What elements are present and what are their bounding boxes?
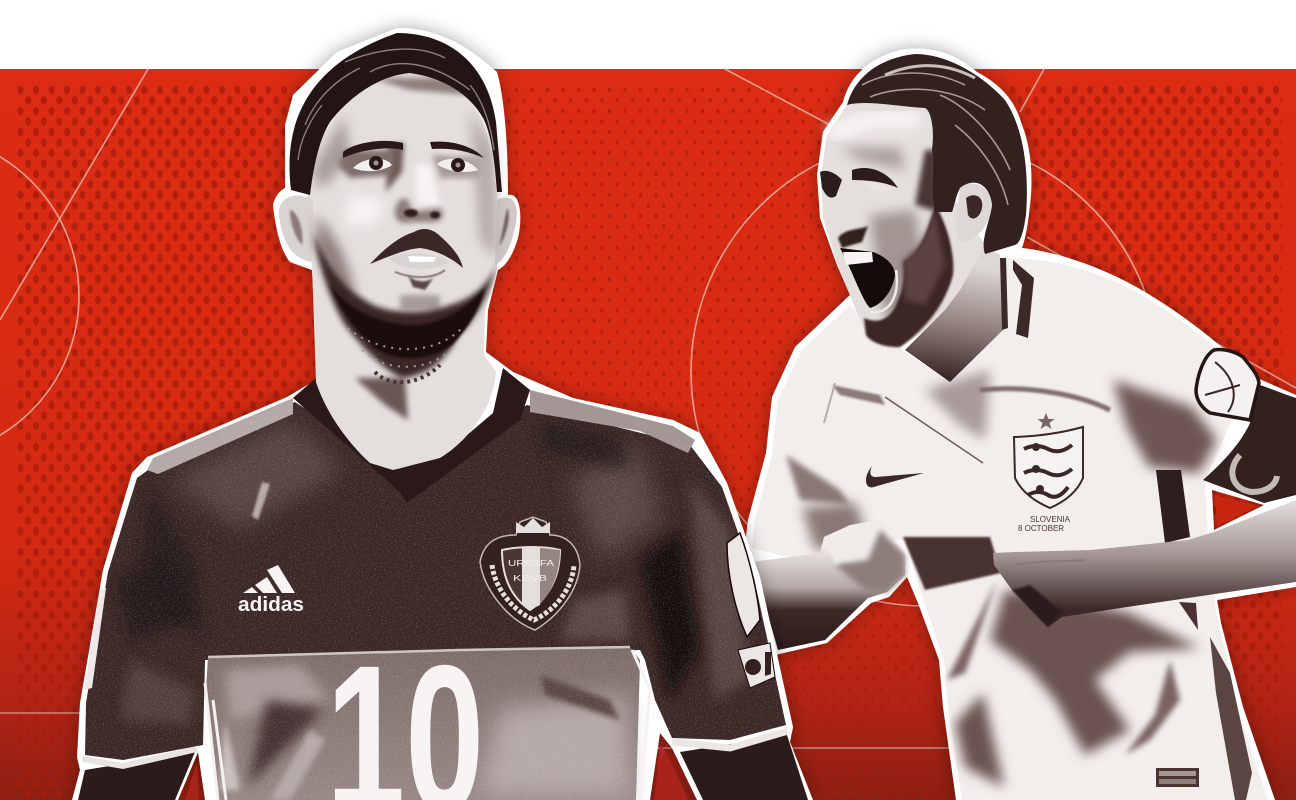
shirt base [752,258,1268,800]
logo: adidas [238,565,304,616]
right arm [993,500,1296,627]
eyes and brows [820,168,898,198]
open mouth [840,248,895,308]
head base [821,102,985,347]
ear right [495,198,517,265]
shirt match text: SLOVENIA [1030,515,1071,524]
side stripes [205,650,650,800]
nose [838,226,868,248]
under-shirt dark fold [903,537,1001,590]
player right: white cut-out outline [744,49,1296,800]
band top edge [208,647,630,657]
beard [313,232,497,382]
ear left [279,196,313,262]
hair highlights [862,66,1010,205]
ear [956,183,992,242]
mouth [388,253,450,269]
shirt grain texture [85,402,786,800]
sleeve badge [1196,349,1259,420]
beard texture [348,328,462,367]
eyes [353,159,478,172]
right sleeve shadow [1113,380,1217,473]
player right: shirt and body [752,54,1296,800]
player right: shirt and body: 8 OCTOBER [1018,524,1064,533]
left arm and fist [752,520,905,650]
sleeve sponsor patch [738,643,775,688]
nose [395,198,443,223]
sleeve badge [727,533,760,637]
icon: swoosh [866,466,924,487]
hair [289,33,502,195]
collar [293,368,530,503]
sleeve shading [802,503,868,550]
player left: shirt and body [78,33,808,800]
icon: belgium crest [480,517,580,630]
logo: adidas: adidas [238,594,304,616]
neck [905,230,1003,382]
icon: belgium crest: KBVB [513,574,547,583]
player left: white cut-out outline [72,28,813,800]
icon: belgium crest: URBSFA [508,559,555,568]
brows [343,141,484,158]
light band on shirt [206,647,640,800]
shoulder stripes [147,398,293,474]
left sleeve piping [84,588,106,690]
cuffs and forearms [78,752,195,800]
shirt sheen patches [115,420,750,725]
armband [1203,384,1296,503]
shirt size label [1156,768,1199,787]
belly shadows [990,590,1200,755]
red gap beneath left cuff [185,762,199,800]
moustache [370,229,463,268]
hair [847,54,1027,254]
main shirt [85,402,786,760]
band shading [220,665,630,800]
icon: england crest [1014,413,1083,508]
side stripes [1156,470,1190,543]
neck and face base [307,72,497,470]
face shading [830,118,920,135]
beard [864,205,953,347]
hair highlights [298,49,494,160]
face shading [312,78,497,420]
red gap between armband and arm [1215,495,1258,526]
collar [1000,258,1034,338]
red gap beneath right cuff [654,745,688,800]
